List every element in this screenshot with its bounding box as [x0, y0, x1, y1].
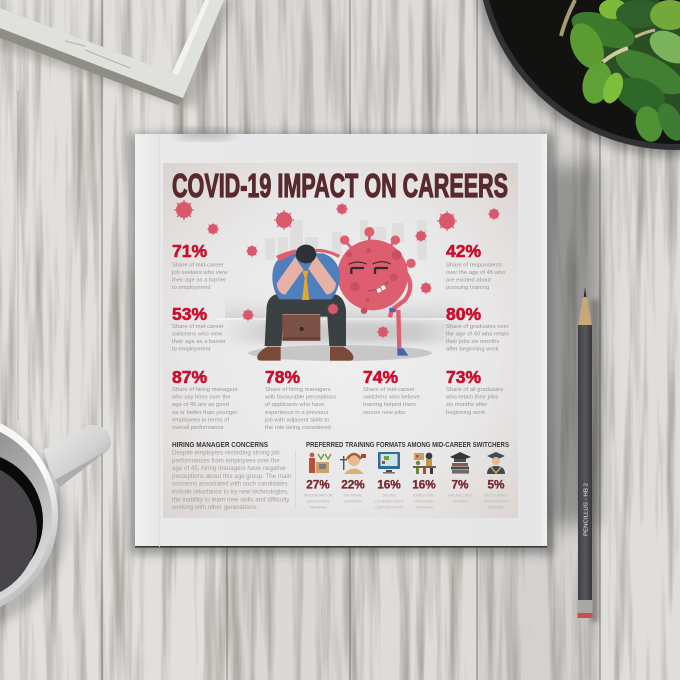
stat: 73%: who retain their jobs [445, 395, 498, 401]
stat: 73%: 73% [446, 367, 481, 387]
stat: 87%: who say hires over the [171, 395, 230, 401]
stat: 78%: experience in a previous [265, 410, 328, 416]
format: bachelor's degree 7% [448, 452, 472, 504]
format: internship 27%: 27% [306, 478, 330, 492]
stat: 53%: 53% [172, 304, 207, 324]
stat: 73% [445, 367, 503, 416]
stat: 42%: Share of respondents [446, 262, 502, 268]
stat: 74%: 74% [363, 367, 398, 387]
format: employer provided training 16%: TRAINING [415, 506, 433, 510]
section: preferred training formats: PREFERRED TRAINING FORMATS AMONG MID-CAREER SWITCHERS [306, 440, 509, 449]
mug handle [43, 425, 111, 487]
title: COVID-19 IMPACT ON CAREERS [172, 167, 508, 204]
stat: 42%: pursuing training [446, 285, 489, 291]
section: preferred training formats [304, 440, 509, 510]
stat: 74%: secure new jobs [363, 410, 405, 416]
stat: 78%: 78% [265, 367, 300, 387]
format: employer provided training 16%: 16% [412, 478, 436, 492]
format: online courses 16% [375, 452, 404, 510]
stat: 71%: job seekers who view [171, 270, 228, 276]
plant pot with leaves [474, 0, 680, 156]
stat: 42%: are excited about [446, 278, 491, 284]
format: employer provided training 16%: PROVIDED [414, 500, 434, 504]
text block: hiring manager concerns: working with other generations. [171, 504, 258, 511]
stat: 80% [446, 304, 509, 352]
text block: hiring manager concerns: include reluctance to try new technologies, [172, 488, 289, 496]
stat: 80%: 80% [446, 304, 481, 324]
stat: 80%: the age of 40 who retain [446, 332, 509, 338]
format: doctorate or master's degree 5%: DEGREE [488, 506, 504, 510]
soil [483, 0, 680, 144]
man and virus artwork [257, 228, 414, 361]
format: online courses 16%: ONLINE [382, 494, 396, 498]
text block: hiring manager concerns: HIRING MANAGER CONCERNS [172, 440, 268, 449]
stat: 42%: 42% [446, 241, 481, 261]
format: employer provided training 16% [412, 453, 436, 510]
stat: 73%: six months after [446, 402, 487, 408]
stat: 87%: 87% [172, 367, 207, 387]
format: bachelor's degree 7%: 7% [451, 478, 469, 492]
stat: 73%: Share of all graduates [446, 387, 503, 393]
format: informal learning 22%: LEARNING [344, 500, 363, 504]
stat: 78% [264, 367, 336, 431]
stat: 78%: with favourable perceptions [264, 395, 336, 401]
stat: 71%: Share of mid-career [172, 262, 224, 268]
stat: 42%: over the age of 45 who [446, 270, 505, 276]
stat: 87%: Share of hiring managers [172, 387, 238, 393]
format: online courses 16%: COURSES WITH [375, 500, 404, 504]
stat: 53%: their age as a barrier [172, 339, 226, 345]
pot rim [477, 0, 680, 150]
text block: hiring manager concerns [171, 440, 292, 511]
format: internship 27%: TRAINING [309, 506, 327, 510]
stat: 87% [171, 367, 238, 431]
virus legs [390, 273, 410, 348]
stat: 53%: Share of mid-career [172, 324, 224, 330]
format: doctorate or master's degree 5%: OR MASTER'S [483, 500, 509, 504]
city skyline [265, 220, 427, 260]
stat: 53% [172, 304, 226, 352]
stat: 87%: employees in terms of [172, 417, 230, 423]
virus arm around shoulders [276, 249, 340, 261]
pencil label: PENCILLUS ◦ HB 2 [584, 483, 590, 536]
format: internship 27%: INTERNSHIP OR [304, 494, 333, 498]
format: informal learning 22%: 22% [341, 478, 365, 492]
stat: 71%: their age as a barrier [172, 278, 226, 284]
floor bands [215, 290, 475, 343]
stat: 87%: age of 45 are as good [172, 402, 229, 408]
format: online courses 16%: CERTIFICATION [375, 506, 403, 510]
format: informal learning 22% [340, 454, 366, 504]
stat: 71%: 71% [172, 241, 207, 261]
stat: 80%: Share of graduates over [446, 324, 509, 330]
format: online courses 16%: 16% [377, 478, 401, 492]
floor shadow [248, 345, 432, 361]
stat: 78%: of applicants who have [265, 402, 324, 408]
virus body [337, 228, 414, 356]
stat: 71%: to employment [172, 285, 211, 291]
stat: 53%: to employment [172, 346, 211, 352]
stat: 42% [446, 241, 505, 291]
stat: 80%: their jobs six months [446, 339, 499, 345]
stat: 74%: Share of mid-career [363, 387, 415, 393]
coffee [0, 452, 43, 590]
text block: hiring manager concerns: concerns associated with such candidates [172, 481, 288, 488]
stat: 74%: training helped them [363, 402, 416, 408]
text block: hiring manager concerns: Despite employers recording strong job [172, 450, 280, 456]
text block: hiring manager concerns: performances from employees over the [172, 457, 280, 464]
stat: 74%: switchers who believe [363, 395, 420, 401]
stat: 80%: after beginning work [446, 346, 499, 352]
illustration: stressed man and virus [215, 220, 475, 361]
text block: hiring manager concerns: the inability to learn new skills and difficulty [172, 496, 290, 503]
virus face [349, 262, 391, 293]
mug body [0, 413, 58, 617]
stat: 73%: beginning work [446, 410, 485, 416]
floating virus particles [174, 200, 500, 338]
plant leaves [561, 0, 680, 145]
stat: 87%: overall performance [172, 425, 224, 431]
pencil [549, 165, 599, 622]
format: internship 27%: VOCATIONAL [306, 500, 330, 504]
picture frame [0, 0, 236, 110]
infographic panel [163, 163, 518, 518]
format: bachelor's degree 7%: BACHELOR'S [448, 494, 472, 498]
man [257, 245, 353, 361]
stat: 78%: Share of hiring managers [265, 387, 331, 393]
format: doctorate or master's degree 5% [483, 452, 509, 510]
text block: hiring manager concerns: age of 45, hiring managers have negative [172, 465, 286, 472]
stat: 87%: as or better than younger [172, 410, 237, 416]
stat: 71% [171, 241, 228, 291]
format: informal learning 22%: INFORMAL [343, 494, 363, 498]
stat: 78%: job with adjacent skills to [264, 417, 329, 423]
stat: 74% [363, 367, 420, 416]
format: internship 27% [304, 453, 333, 510]
stat: 53%: switchers who view [172, 332, 223, 338]
stat: 78%: the role being considered [265, 425, 331, 431]
format: employer provided training 16%: EMPLOYER- [413, 494, 436, 498]
book [130, 129, 554, 554]
format: doctorate or master's degree 5%: 5% [487, 478, 505, 492]
text block: hiring manager concerns: perceptions about this age group. The main [172, 473, 292, 480]
coffee mug [0, 413, 111, 631]
format: bachelor's degree 7%: DEGREE [452, 500, 468, 504]
format: doctorate or master's degree 5%: DOCTORATE [485, 494, 508, 498]
